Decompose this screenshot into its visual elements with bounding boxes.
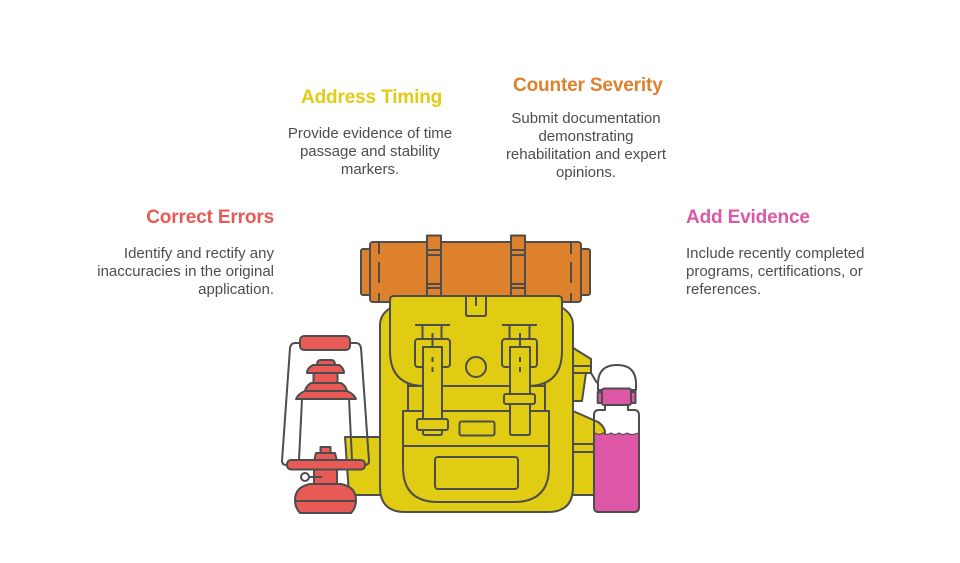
text: Add Evidence description (686, 245, 864, 298)
text: Correct Errors description: application. (198, 281, 274, 298)
text: Correct Errors description (97, 245, 274, 298)
text: Counter Severity description: rehabilitation and expert (506, 146, 666, 163)
text: Counter Severity description: demonstrating (538, 128, 634, 145)
text: Add Evidence description: references. (686, 281, 761, 298)
text: Add Evidence description: Include recently completed (686, 245, 864, 262)
icon: water bottle back layer (594, 365, 639, 512)
heading: Counter Severity: Counter Severity (513, 75, 663, 96)
side pockets of backpack (345, 346, 605, 495)
bedroll (361, 236, 590, 302)
heading: Address Timing: Address Timing (301, 87, 442, 108)
front pocket (403, 411, 549, 502)
icon: water bottle front layer (594, 388, 639, 512)
text: Address Timing description: passage and stability (300, 143, 440, 160)
backpack body (380, 296, 573, 512)
text: Address Timing description: Provide evidence of time (288, 125, 452, 142)
text: Counter Severity description: Submit documentation (511, 110, 661, 127)
heading: Add Evidence: Add Evidence (686, 207, 810, 228)
text: Counter Severity description (506, 110, 666, 181)
right buckle (502, 325, 537, 339)
left buckle (415, 325, 450, 339)
text: Add Evidence description: programs, certifications, or (686, 263, 863, 280)
text: Counter Severity description: opinions. (556, 164, 616, 181)
text: Correct Errors description: inaccuracies in the original (97, 263, 274, 280)
text: Address Timing description (288, 125, 452, 178)
icon: lantern (282, 336, 369, 513)
top flap (390, 296, 562, 386)
heading: Correct Errors: Correct Errors (146, 207, 274, 228)
text: Correct Errors description: Identify and rectify any (124, 245, 274, 262)
text: Address Timing description: markers. (341, 161, 399, 178)
